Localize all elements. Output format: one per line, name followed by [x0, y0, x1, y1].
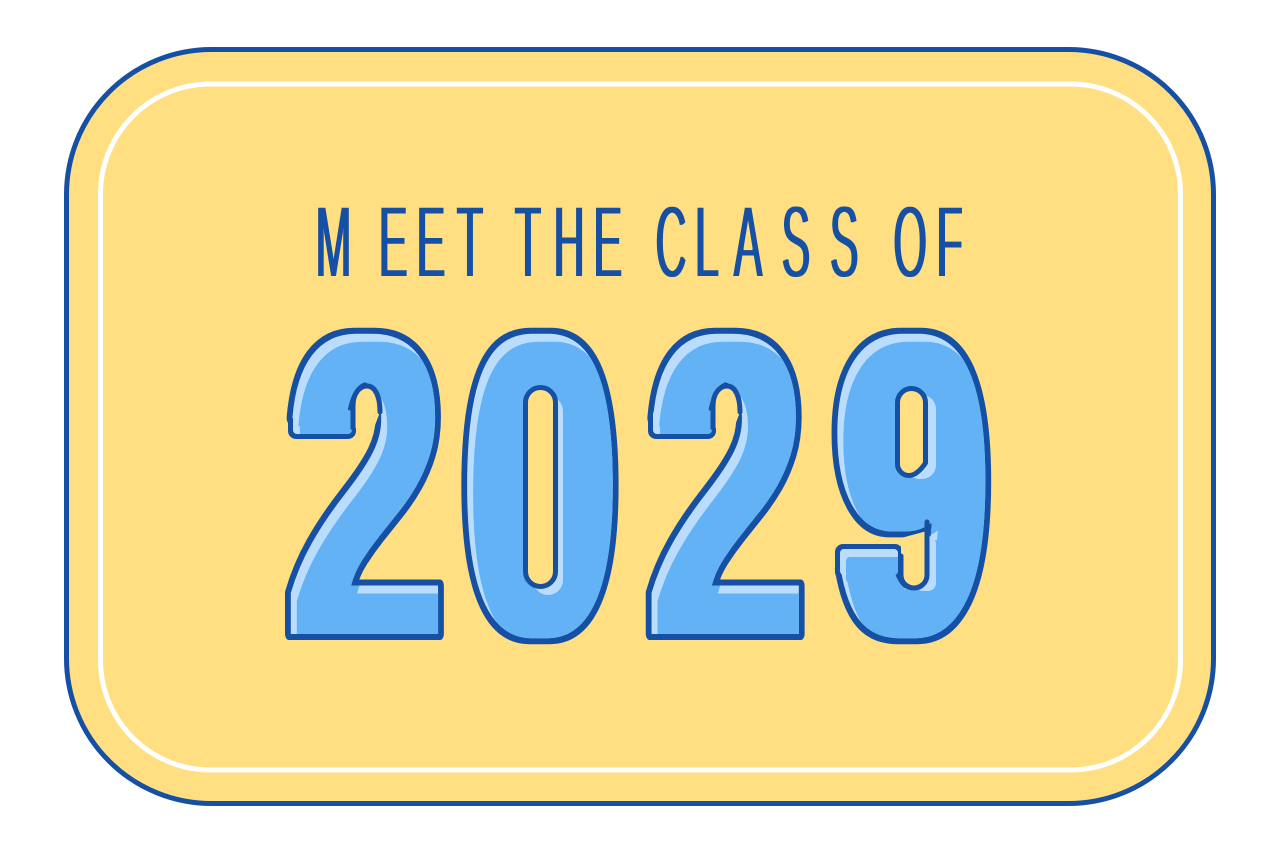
heading: meet the class of: MEET THE CLASS OF [316, 184, 963, 299]
year numerals 2029: 2029 [295, 254, 994, 734]
year numerals 2029: 2029 [289, 246, 988, 726]
year numerals 2029 [285, 328, 992, 644]
notch of 9 [901, 522, 945, 610]
year numerals 2029: 2029 [289, 246, 988, 726]
notch of second 2 [713, 386, 740, 428]
counter of 9 [888, 378, 942, 505]
notch of first 2 [353, 386, 380, 428]
inner white border [100, 84, 1180, 770]
counter of 0 [515, 378, 570, 603]
badge background panel [66, 50, 1214, 804]
